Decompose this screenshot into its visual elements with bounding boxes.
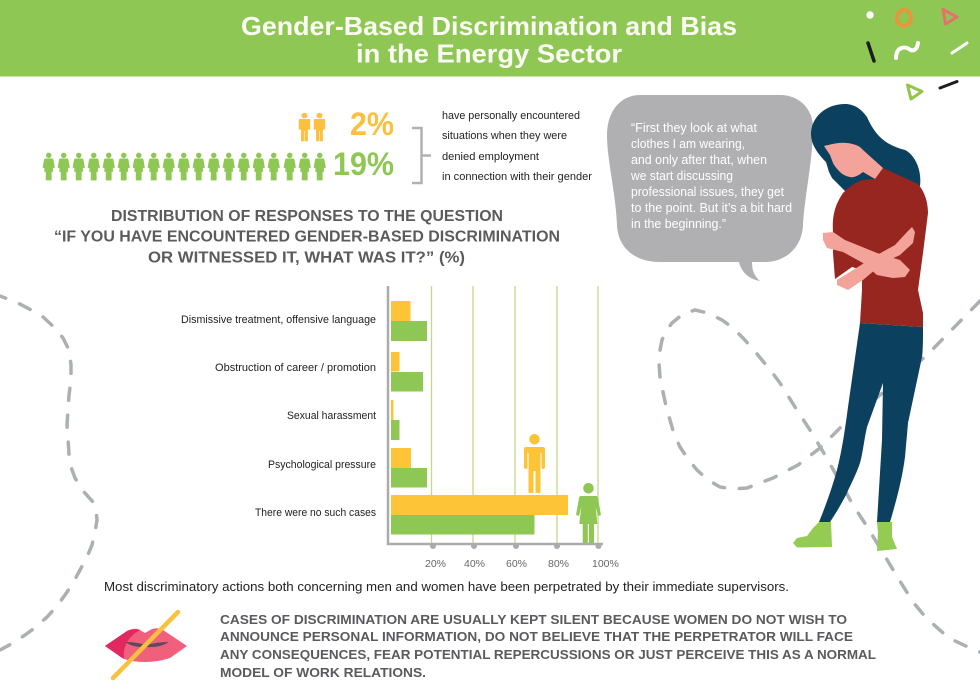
illustration: woman with crossed arms — [793, 104, 928, 551]
stat: 19% women — [43, 146, 394, 182]
icon: nineteen women — [43, 153, 326, 180]
green bars: women — [391, 321, 534, 534]
silence explanation text — [220, 612, 876, 680]
pants — [819, 323, 923, 522]
dashed line: left background — [0, 296, 97, 650]
quote text — [630, 121, 792, 231]
header banner — [0, 0, 980, 76]
axis labels: 40% — [464, 558, 485, 570]
bracket — [412, 128, 431, 183]
icon: crossed-out lips — [105, 612, 187, 678]
stat description: in connection with their gender — [442, 171, 592, 183]
value 2%: 2% — [350, 106, 394, 142]
category labels: Dismissive treatment, offensive language — [181, 314, 376, 326]
silence explanation text: CASES OF DISCRIMINATION ARE USUALLY KEPT SILENT BECAUSE WOMEN DO NOT WISH TO — [220, 612, 847, 627]
axis labels — [425, 558, 619, 570]
icon: two men — [299, 113, 325, 141]
axis labels: 20% — [425, 558, 446, 570]
chart heading: DISTRIBUTION OF RESPONSES TO THE QUESTION — [111, 208, 503, 225]
chart heading: OR WITNESSED IT, WHAT WAS IT?” (%) — [148, 250, 465, 266]
icon: man legend — [524, 434, 545, 493]
quote text: and only after that, when — [631, 153, 767, 167]
boots — [793, 522, 897, 551]
axis labels: 60% — [506, 558, 527, 570]
axes — [388, 286, 603, 549]
stat description: have personally encountered — [442, 110, 580, 122]
silence explanation text: MODEL OF WORK RELATIONS. — [220, 665, 426, 680]
icon: woman legend — [576, 483, 601, 543]
quote text: to the point. But it’s a bit hard — [631, 201, 792, 215]
stat description: denied employment — [442, 151, 539, 163]
axis labels: 100% — [592, 558, 619, 570]
silence explanation text: ANNOUNCE PERSONAL INFORMATION, DO NOT BELIEVE THAT THE PERPETRATOR WILL FACE — [220, 629, 853, 644]
shirt — [833, 168, 928, 327]
category labels: Obstruction of career / promotion — [215, 362, 376, 374]
value 19%: 19% — [333, 146, 394, 182]
silence explanation text: ANY CONSEQUENCES, FEAR POTENTIAL REPERCUSSIONS OR JUST PERCEIVE THIS AS A NORMAL — [220, 647, 876, 662]
quote text: clothes I am wearing, — [631, 137, 745, 151]
quote text: in the beginning.” — [631, 217, 726, 231]
stat description: situations when they were — [442, 130, 567, 142]
title — [241, 11, 737, 68]
axis labels: 80% — [548, 558, 569, 570]
quote text: “First they look at what — [631, 121, 758, 135]
stat: 2% men — [299, 106, 394, 142]
chart heading: “IF YOU HAVE ENCOUNTERED GENDER-BASED DISCRIMINATION — [54, 228, 560, 246]
speech bubble — [607, 95, 813, 281]
hair — [811, 104, 920, 193]
supervisors sentence: Most discriminatory actions both concerning men and women have been perpetrated by their immediate supervisors. — [104, 579, 789, 594]
yellow bars: men — [391, 301, 568, 515]
category labels — [181, 314, 376, 519]
quote text: professional issues, they get — [631, 185, 785, 199]
category labels: Psychological pressure — [268, 459, 376, 471]
stat description — [442, 110, 592, 183]
bar chart — [181, 286, 619, 570]
dashed loop: right background — [659, 301, 980, 652]
title: in the Energy Sector — [356, 38, 622, 68]
category labels: There were no such cases — [255, 507, 376, 519]
quote text: we start discussing — [630, 169, 733, 183]
decorative confetti shapes — [866, 10, 967, 99]
chart heading — [54, 208, 560, 266]
face and neck — [824, 143, 883, 179]
category labels: Sexual harassment — [287, 410, 376, 422]
arms — [823, 227, 915, 290]
title: Gender-Based Discrimination and Bias — [241, 11, 737, 41]
